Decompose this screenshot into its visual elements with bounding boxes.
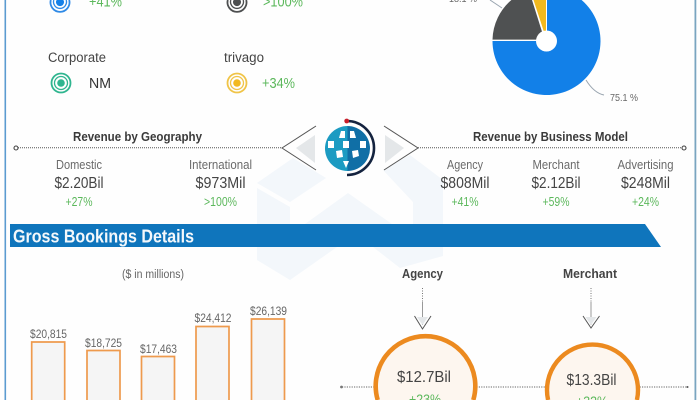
metric: merchant [532,158,580,209]
metric: merchant: +59% [542,195,570,209]
value: Corporate: NM [89,76,111,92]
circle: Agency gross bookings [376,336,475,400]
metric: merchant: $2.12Bil [532,175,580,192]
bar: 26,139 [250,306,287,400]
metric: agency: Agency [447,158,484,172]
donut hole [536,30,557,52]
segment legend [48,0,303,92]
metric: international: >100% [204,195,237,209]
chart note: ($ in millions) [122,269,184,281]
section heading banner: Gross Bookings Details [13,226,194,246]
bar: 24,412: $24,412 [194,313,232,325]
metric: advertising: $248Mil [621,175,670,192]
icon: yellow target [228,74,246,92]
icon: dark target [228,0,247,12]
bar: 26,139: $26,139 [250,306,287,318]
bar: 17,463 [140,344,177,400]
bar: 17,463: $17,463 [140,344,177,356]
label: Corporate: Corporate [48,50,106,65]
metric: domestic: +27% [66,195,92,209]
donut chart [449,0,638,104]
metric: international: International [189,158,252,172]
metric: domestic: $2.20Bil [54,175,104,192]
heading: Revenue by Business Model [473,129,628,144]
slice: blue 75.1% [492,0,600,95]
circle: Merchant gross bookings [547,345,638,400]
metric: merchant: Merchant [532,158,580,172]
connector lines [14,146,686,150]
metric: agency: +41% [452,195,478,209]
dotted baseline [340,386,688,388]
metric: advertising: +24% [632,195,659,209]
bar: 20,815: $20,815 [30,329,67,341]
panel: revenue by business model [440,129,674,209]
circle: Merchant gross bookings: $13.3Bil [566,372,616,389]
panel: revenue by geography [54,129,252,209]
growth: trivago: +34% [262,76,295,92]
icon: blue target [50,0,70,12]
metric: agency: $808Mil [440,175,490,192]
slice: dark 18.1% [492,0,544,40]
metric: domestic [54,158,104,209]
metric: advertising [618,158,674,209]
slice: yellow [534,0,546,38]
metric: advertising: Advertising [618,158,674,172]
icon: globe [325,119,374,175]
metric: agency [440,158,490,209]
circle: Agency gross bookings: $12.7Bil [397,369,451,386]
leader: dark slice [490,0,502,8]
arrow: Merchant [583,288,600,328]
bar: 20,815 [30,329,67,400]
heading: Revenue by Geography [73,129,203,144]
section heading banner [10,224,661,247]
heading: Merchant: Merchant [563,267,618,281]
metric: international: $973Mil [196,175,246,192]
heading: Agency: Agency [402,267,443,281]
bar: 18,725: $18,725 [85,338,122,350]
left frame line [4,0,6,400]
bar: 24,412 [194,313,232,400]
right chevron [384,126,418,170]
leader: blue slice [586,80,604,95]
arrow: Agency [414,288,431,329]
metric: international [189,158,252,209]
label: 75.1%: 75.1 % [610,92,638,104]
bar chart [30,306,287,400]
hexagon watermark [257,155,443,280]
bar: 18,725 [85,338,122,400]
left chevron [282,126,316,170]
icon: green target [52,74,70,92]
right frame line [694,0,696,400]
metric: domestic: Domestic [56,158,102,172]
label: trivago: trivago [224,50,264,65]
